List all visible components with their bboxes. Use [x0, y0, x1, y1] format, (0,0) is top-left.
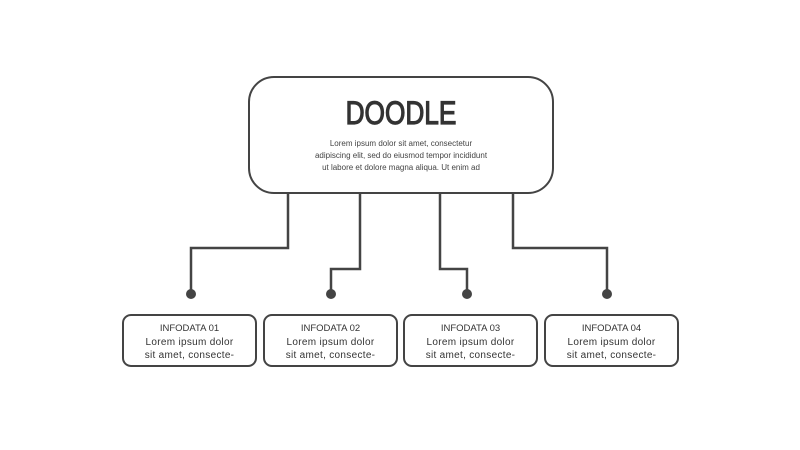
panel: infodata 02: INFODATA 02	[301, 323, 360, 334]
panel: infodata 01: Lorem ipsum dolor	[146, 337, 233, 348]
description	[315, 139, 488, 172]
panel: infodata 04: INFODATA 04	[582, 323, 641, 334]
panel: infodata 04: sit amet, consecte-	[567, 350, 656, 361]
panel: infodata 04	[544, 314, 679, 367]
description: adipiscing elit, sed do eiusmod tempor incididunt	[315, 151, 487, 160]
panel: infodata 01	[122, 314, 257, 367]
panel: infodata 01: sit amet, consecte-	[145, 350, 234, 361]
panel: infodata 03: INFODATA 03	[441, 323, 500, 334]
panel: infodata 04: Lorem ipsum dolor	[568, 337, 655, 348]
main panel	[248, 76, 554, 194]
panel: infodata 03: Lorem ipsum dolor	[427, 337, 514, 348]
panel: infodata 02	[263, 314, 398, 367]
title: DOODLE	[346, 95, 456, 131]
description: Lorem ipsum dolor sit amet, consectetur	[330, 139, 472, 148]
panel: infodata 03: sit amet, consecte-	[426, 350, 515, 361]
panel: infodata 03	[403, 314, 538, 367]
panel: infodata 01: INFODATA 01	[160, 323, 219, 334]
panel: infodata 02: sit amet, consecte-	[286, 350, 375, 361]
panel: infodata 02: Lorem ipsum dolor	[287, 337, 374, 348]
description: ut labore et dolore magna aliqua. Ut enim ad	[322, 163, 480, 172]
